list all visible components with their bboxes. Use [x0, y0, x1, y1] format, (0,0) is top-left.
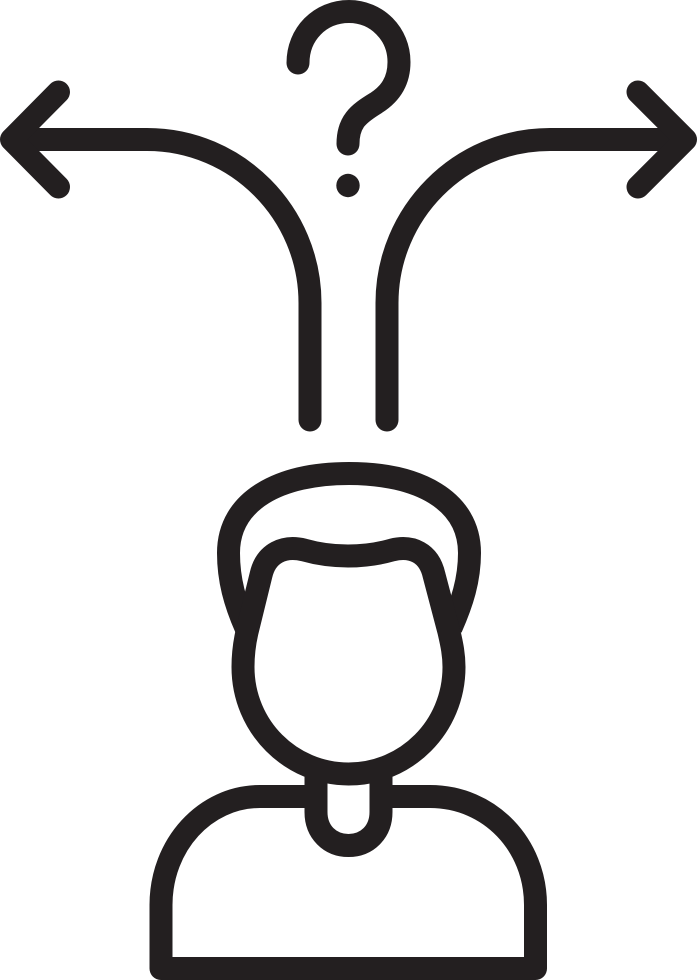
arrow: right branch	[387, 92, 686, 420]
arrow: left branch	[12, 92, 310, 420]
icon: question mark	[298, 12, 399, 197]
icon: person neck and shoulders	[161, 775, 536, 968]
icon: person head and hair	[228, 474, 470, 774]
